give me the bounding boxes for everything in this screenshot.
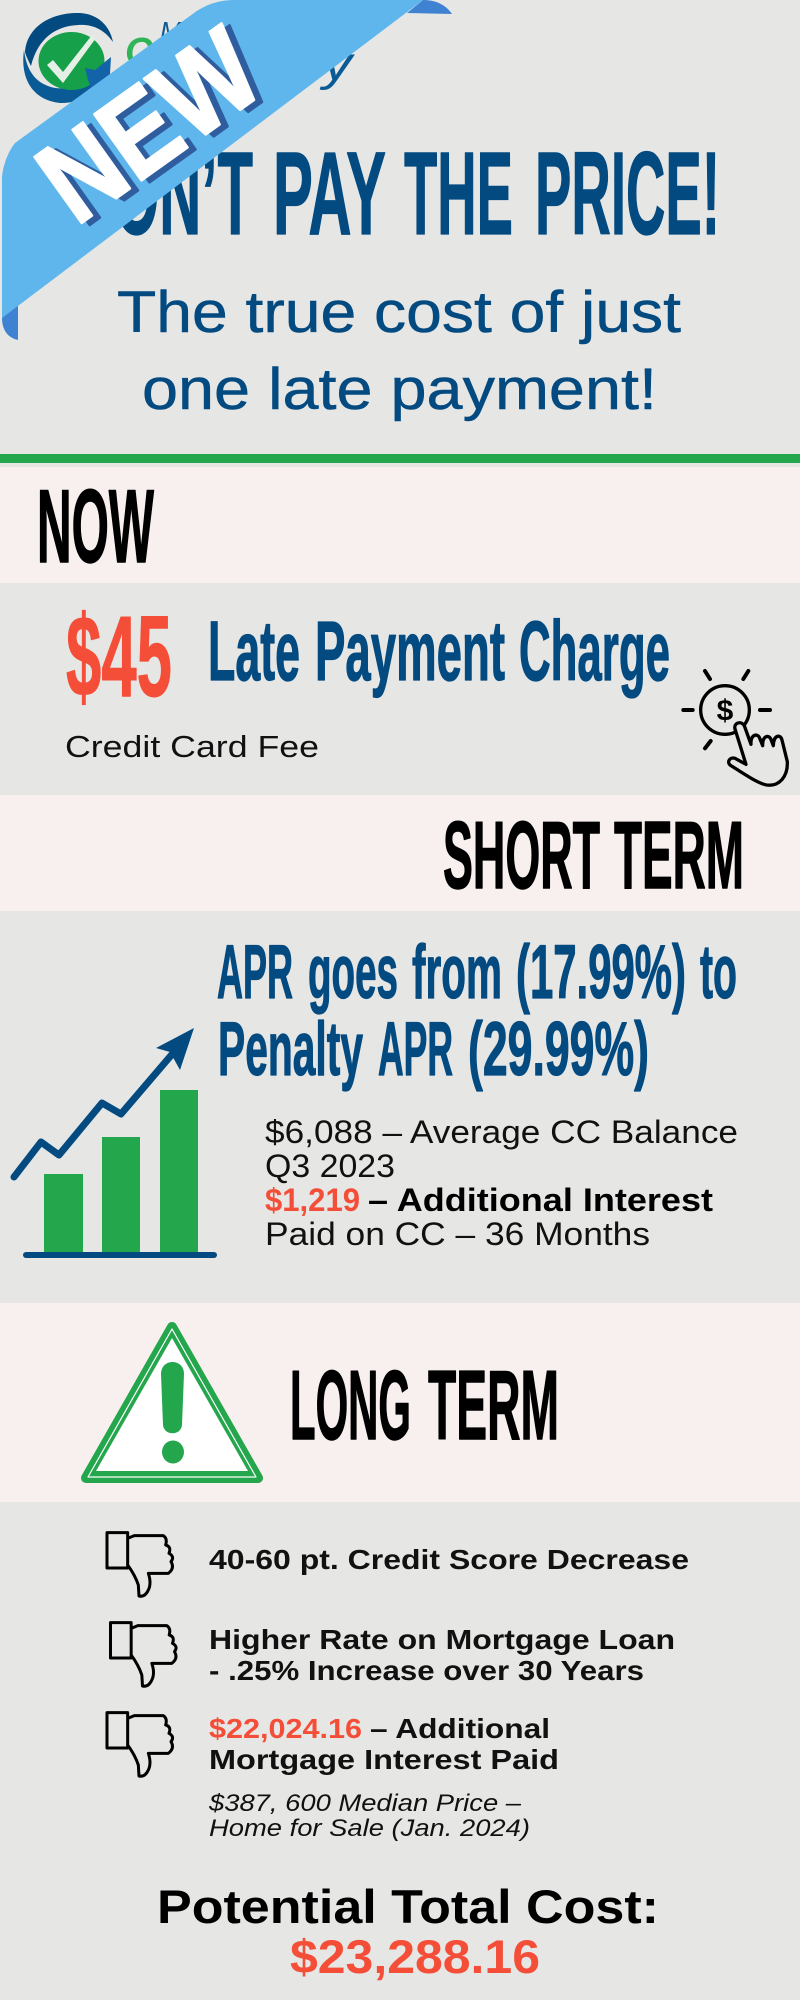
late payment charge heading: Charge bbox=[519, 604, 670, 698]
balance and interest text: – Additional Interest bbox=[368, 1182, 713, 1218]
panel: now heading: NOW bbox=[37, 469, 154, 585]
panel: short term details bbox=[0, 911, 800, 1303]
item: additional mortgage interest: $22,024.16 bbox=[209, 1713, 362, 1744]
late payment charge heading: Late bbox=[208, 604, 300, 698]
panel: now heading bbox=[0, 467, 800, 585]
potential total cost: Potential Total Cost: bbox=[157, 1880, 659, 1933]
apr heading: goes bbox=[308, 930, 398, 1015]
item: additional mortgage interest: – Additional bbox=[370, 1713, 550, 1744]
late payment charge heading: Payment bbox=[315, 604, 505, 698]
potential total cost: $23,288.16 bbox=[290, 1930, 540, 1983]
apr heading: APR bbox=[378, 1007, 453, 1092]
title bbox=[72, 128, 720, 260]
item: additional mortgage interest: Mortgage Interest Paid bbox=[209, 1744, 559, 1775]
note: median home price: Home for Sale (Jan. 2024) bbox=[209, 1815, 530, 1842]
icon: hand pressing dollar button bbox=[683, 671, 787, 785]
apr heading: from bbox=[412, 930, 502, 1015]
panel: short term heading bbox=[0, 795, 800, 911]
note: median home price: $387, 600 Median Price – bbox=[208, 1790, 522, 1817]
icon: thumbs down 2 bbox=[110, 1623, 176, 1686]
panel: now details bbox=[0, 583, 800, 795]
apr heading: (29.99%) bbox=[468, 1007, 649, 1092]
apr heading: to bbox=[700, 930, 737, 1015]
potential total cost bbox=[157, 1880, 659, 1983]
item: higher mortgage rate bbox=[209, 1624, 675, 1686]
subtitle bbox=[117, 280, 681, 422]
balance and interest text: $1,219 bbox=[265, 1182, 360, 1218]
icon: thumbs down 3 bbox=[107, 1713, 173, 1776]
credit card fee label: Credit Card Fee bbox=[65, 729, 319, 764]
panel: short term heading: SHORT bbox=[443, 802, 600, 909]
note: median home price bbox=[208, 1790, 530, 1842]
apr heading: Penalty bbox=[218, 1007, 363, 1092]
subtitle: one late payment! bbox=[142, 357, 657, 422]
apr heading: APR bbox=[217, 930, 293, 1015]
balance and interest text: Q3 2023 bbox=[265, 1148, 395, 1184]
title: DON’T bbox=[72, 128, 253, 260]
logo: y bbox=[319, 38, 356, 91]
subtitle: The true cost of just bbox=[117, 280, 681, 345]
logo bbox=[23, 13, 356, 103]
fee amount: $45 bbox=[66, 593, 172, 721]
icon: warning triangle bbox=[86, 1327, 258, 1478]
apr heading bbox=[217, 930, 737, 1092]
new ribbon bbox=[2, 0, 452, 340]
title: PAY bbox=[273, 128, 386, 260]
green divider bbox=[0, 454, 800, 463]
growth bar chart with arrow bbox=[14, 1028, 217, 1258]
icon: hand pressing dollar button: $ bbox=[717, 695, 734, 728]
long term heading: LONG bbox=[290, 1350, 411, 1460]
panel: long term heading bbox=[0, 1303, 800, 1502]
panel: long term details bbox=[0, 1502, 800, 2000]
panel: long term heading: TERM bbox=[428, 1350, 559, 1460]
logo: M bbox=[160, 16, 182, 46]
balance and interest text: Paid on CC – 36 Months bbox=[265, 1216, 650, 1252]
icon: thumbs down 1 bbox=[107, 1533, 173, 1596]
item: credit score decrease: 40-60 pt. Credit Score Decrease bbox=[209, 1544, 689, 1575]
item: higher mortgage rate: Higher Rate on Mortgage Loan bbox=[209, 1624, 675, 1655]
title: THE bbox=[404, 128, 513, 260]
item: higher mortgage rate: - .25% Increase over 30 Years bbox=[209, 1655, 644, 1686]
item: additional mortgage interest bbox=[209, 1713, 559, 1775]
logo: C bbox=[125, 31, 153, 73]
balance and interest text bbox=[265, 1114, 738, 1252]
balance and interest text: $6,088 – Average CC Balance bbox=[265, 1114, 738, 1150]
